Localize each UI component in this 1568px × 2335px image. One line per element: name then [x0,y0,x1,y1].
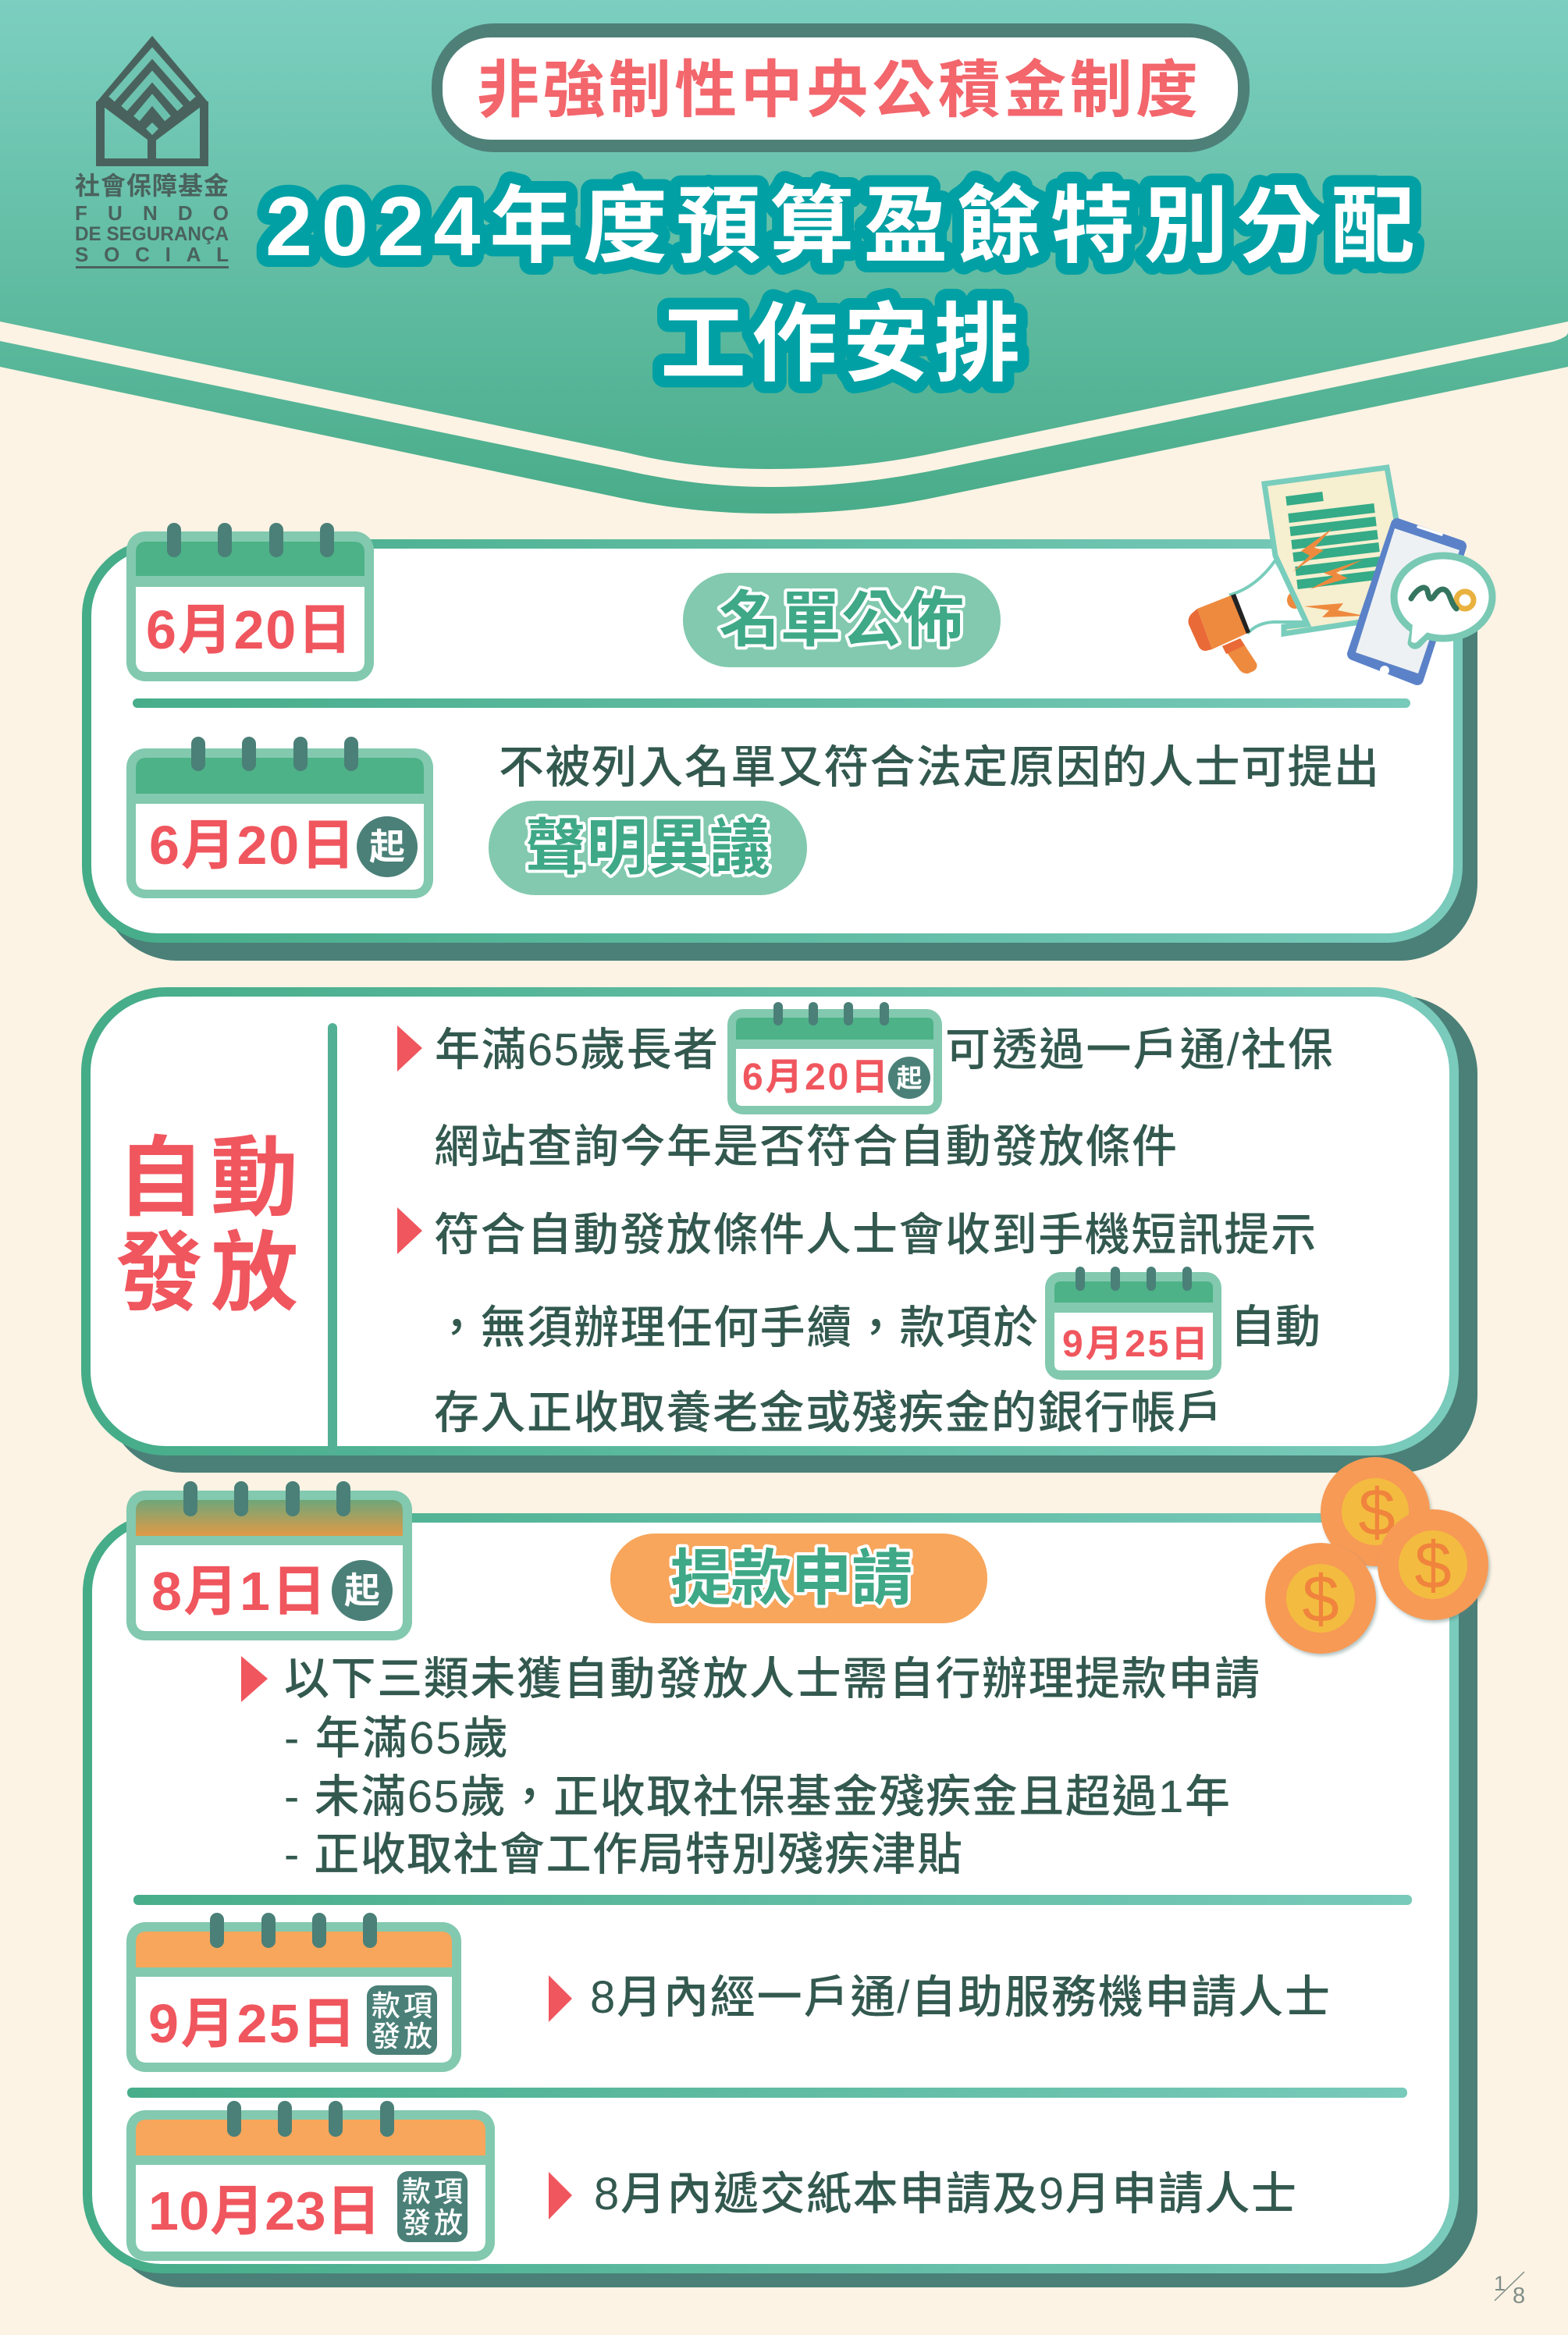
text: line 2: 網站查詢今年是否符合自動發放條件 [434,1121,1177,1172]
arrow [549,2172,572,2219]
coin right: $ [1414,1529,1452,1603]
logo words DE SEGURANÇA: DE SEGURANÇA [75,223,229,245]
heading: automatic payment [116,1129,298,1322]
page number: 8 [1513,2283,1525,2308]
subtitle text: 非強制性中央公積金制度 [477,55,1198,125]
page number [1494,2272,1525,2308]
heading pill: withdrawal application: 提款申請 [670,1544,912,1612]
badge: payment: 發放 [372,2020,432,2052]
text: September 25 group: 8月內經一戶通/自助服務機申請人士 [590,1972,1330,2023]
coin right [1378,1509,1488,1620]
text: line 5: 存入正收取養老金或殘疾金的銀行帳戶 [434,1388,1222,1438]
heading: automatic payment: 自動 [117,1129,298,1227]
calendar: June 20: 6月20日 [146,599,352,660]
icon: megaphone, document and phone [1188,467,1492,679]
arrow [241,1656,268,1702]
list item 2: - 未滿65歲，正收取社保基金殘疾金且超過1年 [284,1772,1230,1822]
text: line 3: 符合自動發放條件人士會收到手機短訊提示 [434,1210,1316,1260]
calendar: from June 20: 6月20日 [149,815,355,876]
heading pill: objection [489,801,807,895]
badge: payment [397,2171,468,2242]
heading pill: list announcement: 名單公佈 [719,585,964,654]
list item 3: - 正收取社會工作局特別殘疾津貼 [284,1829,962,1880]
calendar: October 23 payment: 10月23日 [148,2180,381,2241]
badge: payment: 款項 [402,2176,463,2208]
calendar mini: from June 20: 6月20日 [742,1057,888,1098]
heading pill: list announcement [683,573,1001,667]
document [1264,467,1401,634]
text: October 23 group: 8月內遞交紙本申請及9月申請人士 [594,2169,1296,2219]
arrow [397,1207,422,1254]
logo: Fundo de Segurança Social [75,38,229,268]
logo word FUNDO: FUNDO [75,201,229,225]
badge: payment: 款項 [372,1990,432,2022]
text: objection condition: 不被列入名單又符合法定原因的人士可提出 [499,742,1379,793]
main title line 1: 2024年度預算盈餘特別分配 [265,179,1415,273]
panel: withdrawal application [87,1481,1477,2287]
calendar: September 25 payment: 9月25日 [148,1993,356,2054]
coin top: $ [1358,1476,1396,1550]
calendar: from August 1 [126,1481,412,1640]
calendar: June 20 [126,523,374,681]
heading pill: withdrawal application [610,1534,987,1623]
badge: payment [367,1985,437,2055]
calendar mini: September 25: 9月25日 [1062,1324,1208,1365]
text: who must apply: 以下三類未獲自動發放人士需自行辦理提款申請 [284,1654,1260,1704]
heading: automatic payment: 發放 [116,1224,298,1322]
phone [1353,524,1460,679]
icon: coins [1265,1457,1488,1654]
calendar: October 23 payment [126,2101,495,2261]
speech bubble [1394,556,1492,645]
calendar: from June 20: 起 [369,826,405,867]
coin top [1321,1457,1430,1566]
text: line 4: ，無須辦理任何手續，款項於 [434,1303,1038,1353]
calendar: September 25 payment [126,1913,461,2072]
calendar: from June 20 [126,737,433,898]
page number: 1 [1494,2272,1506,2295]
arrow [549,1975,572,2022]
calendar mini: September 25 [1045,1267,1221,1380]
heading pill: objection: 聲明異議 [525,813,770,882]
calendar: from August 1: 8月1日 [151,1561,326,1622]
subtitle pill [432,23,1250,152]
main title line 2: 工作安排 [660,297,1020,393]
logo icon [96,38,208,166]
logo Chinese name: 社會保障基金 [75,172,229,200]
text: line 1 continued: 可透過一戶通/社保 [945,1025,1333,1075]
text: line 4 continued: 自動 [1230,1302,1321,1352]
arrow [397,1025,422,1072]
panel: automatic payment [86,992,1477,1473]
header banner [0,0,1568,514]
list item 1: - 年滿65歲 [284,1713,508,1764]
badge: payment: 發放 [402,2207,463,2239]
calendar mini: from June 20 [727,1002,942,1114]
panel: list announcement [87,523,1477,961]
logo word SOCIAL: SOCIAL [75,243,229,266]
coin left: $ [1302,1562,1339,1637]
text: line 1: 年滿65歲長者 [435,1025,718,1075]
calendar: from August 1: 起 [344,1570,380,1611]
megaphone [1188,560,1311,673]
calendar mini: from June 20: 起 [896,1064,923,1093]
coin left [1265,1543,1376,1654]
